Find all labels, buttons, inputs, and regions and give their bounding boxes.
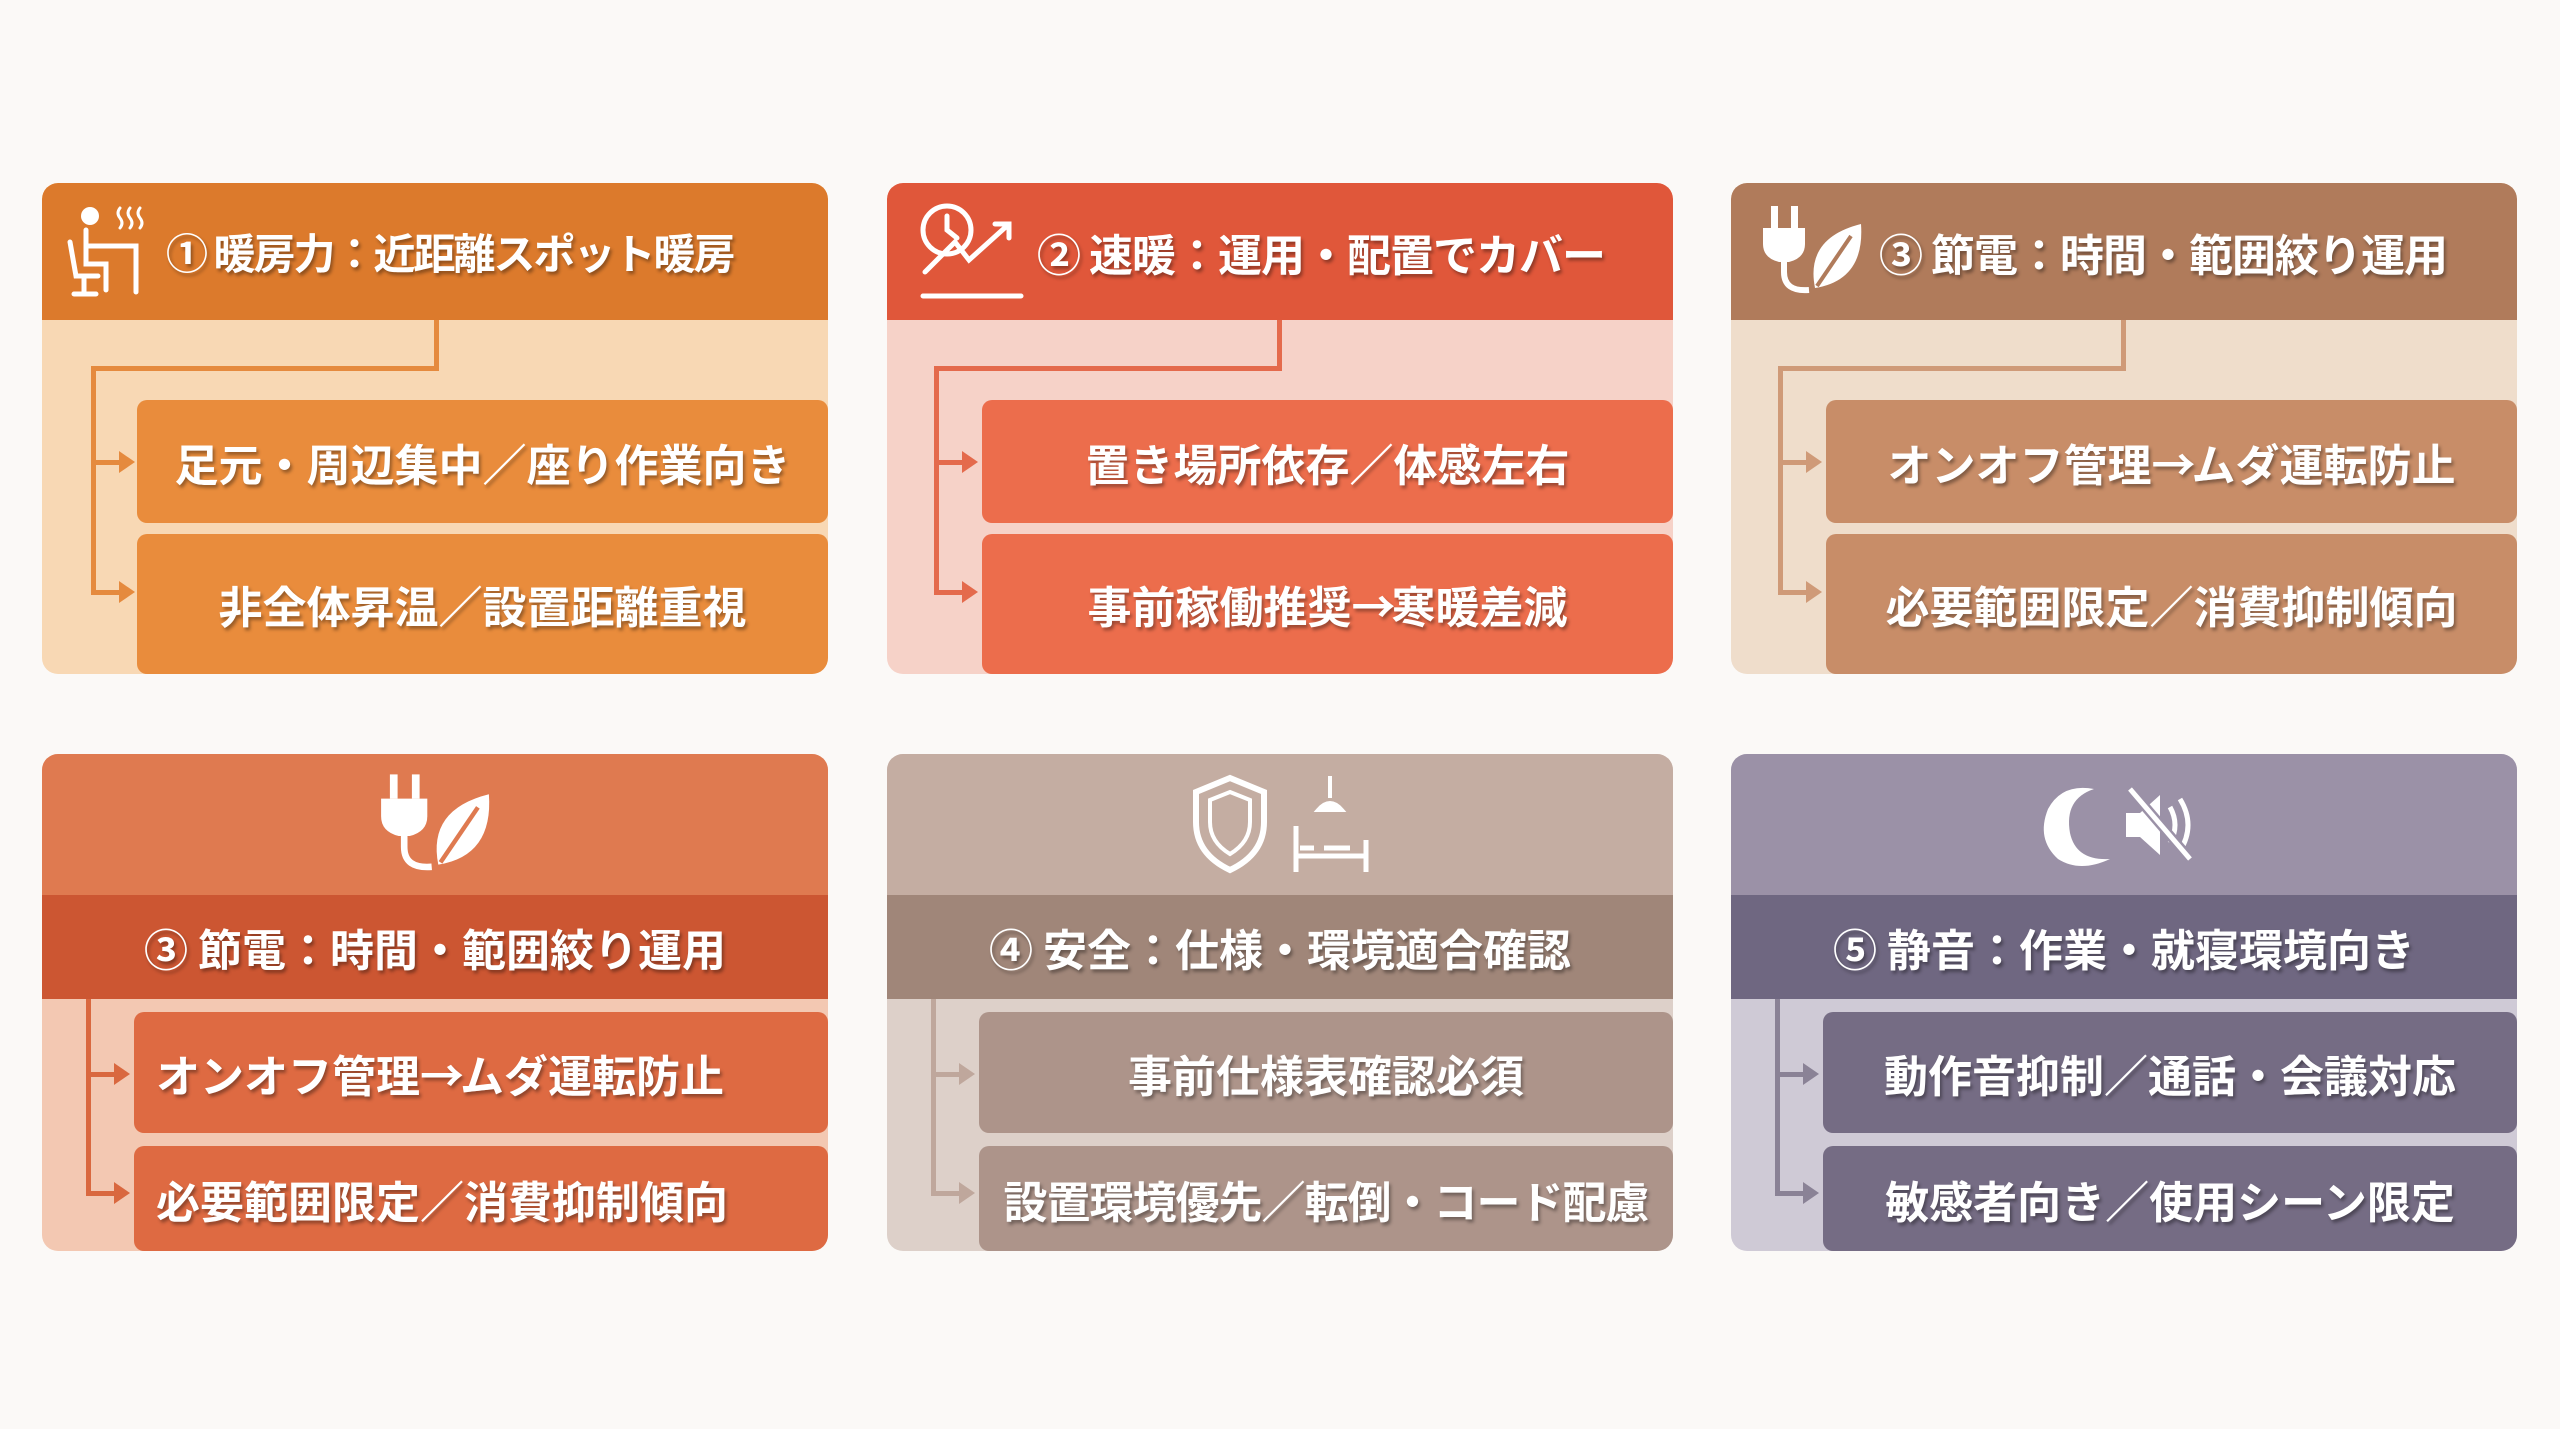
sub item 4-1: 事前仕様表確認必須 xyxy=(1128,1040,1524,1104)
sub item 5-2 xyxy=(1823,1146,2517,1251)
sub item 1-1 xyxy=(137,400,828,523)
sub item 2-1 xyxy=(982,400,1673,523)
sub item 1-1: 足元・周辺集中／座り作業向き xyxy=(174,430,790,494)
sub item 3b-2: 必要範囲限定／消費抑制傾向 xyxy=(156,1166,728,1230)
panel: 1 heating power xyxy=(42,183,828,674)
panel: 4 safety xyxy=(887,754,1673,1251)
header bar 5 xyxy=(1731,895,2517,999)
header 3: ③ 節電：時間・範囲絞り運用 xyxy=(1879,220,2447,284)
panel: 3 power saving (bottom) xyxy=(42,754,828,1251)
sub item 4-2: 設置環境優先／転倒・コード配慮 xyxy=(1004,1166,1648,1230)
sub item 3-1 xyxy=(1826,400,2517,523)
sub item 2-2: → xyxy=(1352,572,1392,636)
sub item 2-2 xyxy=(982,534,1673,674)
header 1: ① 暖房力：近距離スポット暖房 xyxy=(166,221,734,282)
panel: 2 quick heating xyxy=(887,183,1673,674)
icon area: plug leaf xyxy=(42,754,828,895)
header bar 4 xyxy=(887,895,1673,999)
sub item 3-2: 必要範囲限定／消費抑制傾向 xyxy=(1886,572,2458,636)
sub item 3b-1: オンオフ管理 ムダ運転防止 xyxy=(156,1040,724,1104)
sub item 5-1 xyxy=(1823,1012,2517,1133)
sub item 4-1 xyxy=(979,1012,1673,1133)
header bar 4: ④ 安全：仕様・環境適合確認 xyxy=(989,915,1571,979)
sub item 5-1: 動作音抑制／通話・会議対応 xyxy=(1884,1040,2456,1104)
header 3 xyxy=(1731,183,2517,320)
icon: clock with rising arrow xyxy=(920,204,1024,298)
sub item 1-2 xyxy=(137,534,828,674)
sub item 1-2: 非全体昇温／設置距離重視 xyxy=(218,572,746,636)
sub item 3-1: オンオフ管理 ムダ運転防止 xyxy=(1888,430,2456,494)
sub item 3b-1: → xyxy=(420,1040,460,1104)
panel: 3 power saving (top) xyxy=(1731,183,2517,674)
sub item 4-2 xyxy=(979,1146,1673,1251)
sub item 5-2: 敏感者向き／使用シーン限定 xyxy=(1885,1166,2455,1230)
sub item 3-2 xyxy=(1826,534,2517,674)
header 1 xyxy=(42,183,828,320)
header bar 3: ③ 節電：時間・範囲絞り運用 xyxy=(144,915,726,979)
icon area: moon and muted speaker xyxy=(1731,754,2517,895)
header bar 5: ⑤ 静音：作業・就寝環境向き xyxy=(1833,915,2415,979)
sub item 3b-2 xyxy=(134,1146,828,1251)
icon: plug and leaf xyxy=(1763,206,1862,294)
icon: person at desk with heat xyxy=(68,206,144,296)
sub item 2-2: 事前稼働推奨 寒暖差減 xyxy=(1088,572,1568,636)
sub item 2-1: 置き場所依存／体感左右 xyxy=(1086,430,1570,494)
sub item 3-1: → xyxy=(2152,430,2192,494)
header 2: ② 速暖：運用・配置でカバー xyxy=(1037,220,1605,284)
header 2 xyxy=(887,183,1673,320)
header bar 3 xyxy=(42,895,828,999)
sub item 3b-1 xyxy=(134,1012,828,1133)
panel: 5 quiet xyxy=(1731,754,2517,1251)
icon area: shield and bed xyxy=(887,754,1673,895)
